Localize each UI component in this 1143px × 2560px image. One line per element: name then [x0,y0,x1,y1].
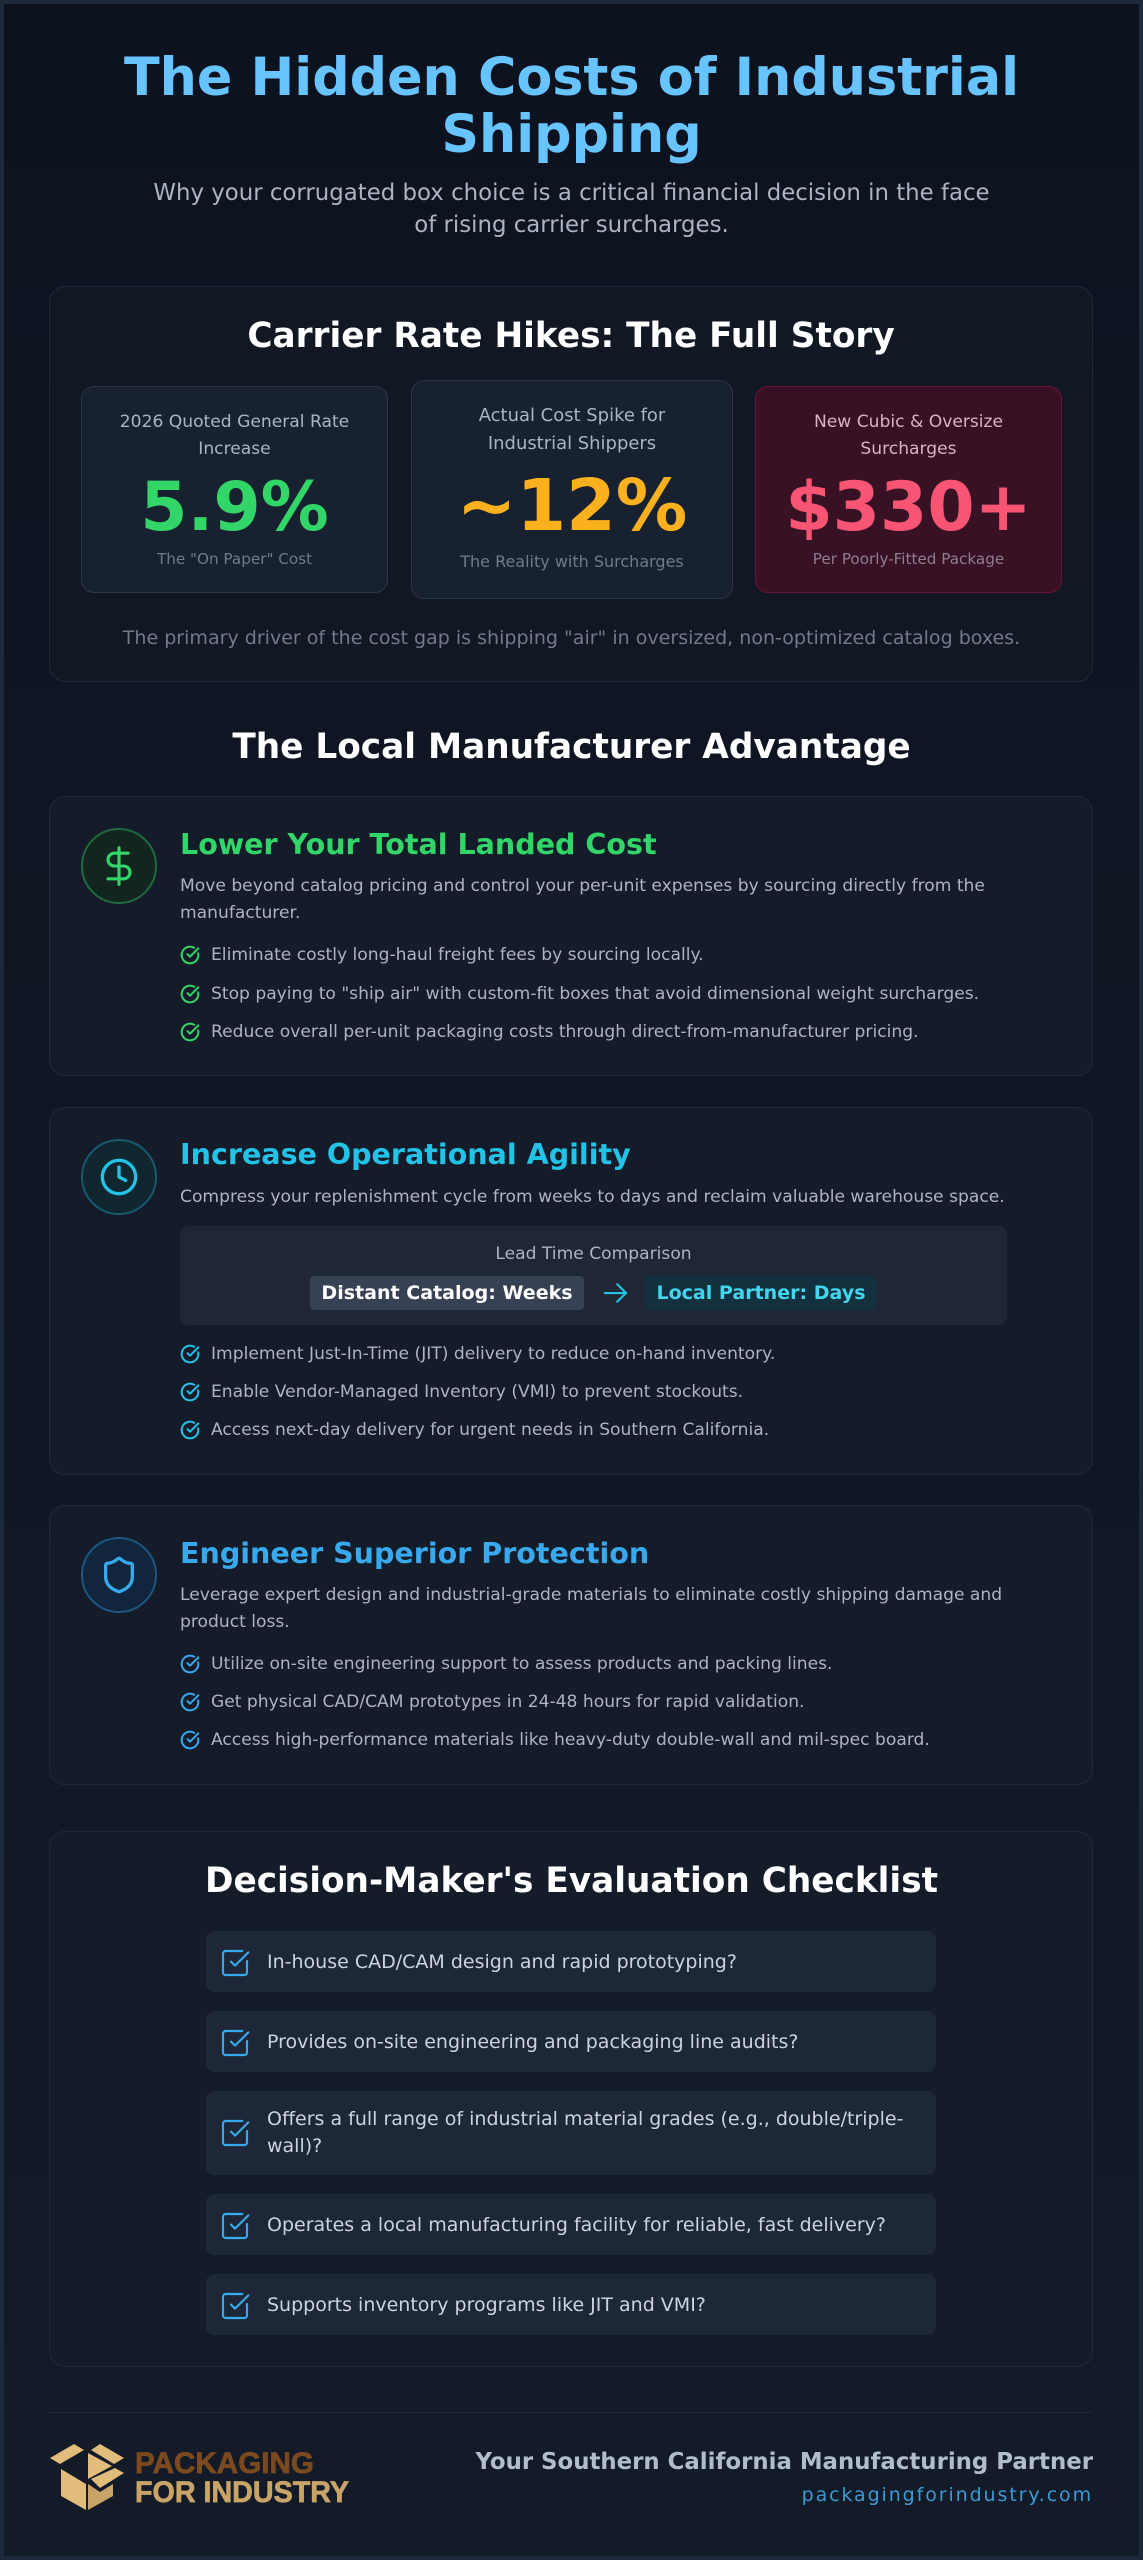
stat label: Industrial Shippers [488,433,656,454]
stat note: The "On Paper" Cost [157,550,312,568]
stat value: 5.9% [140,468,329,547]
bullet: Eliminate costly long-haul freight fees by sourcing locally. [211,945,704,965]
bullet: Stop paying to "ship air" with custom-fit boxes that avoid dimensional weight surcharges. [211,984,979,1004]
bullet: Reduce overall per-unit packaging costs through direct-from-manufacturer pricing. [211,1022,918,1042]
card title: Increase Operational Agility [180,1137,631,1171]
checklist item: In-house CAD/CAM design and rapid prototyping? [267,1951,737,1973]
footer tagline: Your Southern California Manufacturing Partner [475,2449,1093,2475]
chip: local partner [645,1276,877,1310]
card title: Lower Your Total Landed Cost [180,827,657,861]
icon: shield [81,1537,157,1613]
chip: distant catalog: Distant Catalog: Weeks [321,1282,573,1304]
heading: checklist: Decision-Maker's Evaluation Checklist [205,1861,938,1901]
icon: arrow [604,1283,628,1303]
logo wordmark: PACKAGING [135,2447,314,2480]
logo wordmark [135,2447,349,2509]
stat card: actual spike [411,380,733,599]
checklist item: Offers a full range of industrial material grades (e.g., double/triple-wall)? [267,2108,903,2157]
checklist item [206,2011,936,2072]
subtitle [153,180,990,238]
footer url: packagingforindustry.com [802,2484,1093,2506]
card description: Move beyond catalog pricing and control your per-unit expenses by sourcing directly from the manufacturer. [180,876,985,923]
stat label: Actual Cost Spike for [479,405,665,426]
bullet: Access next-day delivery for urgent needs in Southern California. [211,1420,769,1440]
stat card: surcharges [755,386,1062,593]
stat label: Surcharges [860,439,957,459]
panel: carrier rate hikes [49,286,1093,682]
logo wordmark: FOR INDUSTRY [135,2476,349,2509]
panel: agility [49,1107,1093,1475]
heading: advantage: The Local Manufacturer Advantage [232,727,911,767]
bullet: Implement Just-In-Time (JIT) delivery to reduce on-hand inventory. [211,1344,775,1364]
stat card: quoted increase [81,386,388,593]
checklist item [206,2274,936,2335]
checklist item: Provides on-site engineering and packaging line audits? [267,2031,798,2053]
comparison label: Lead Time Comparison [495,1244,692,1264]
stat note: Per Poorly-Fitted Package [813,550,1004,568]
checklist item [206,2091,936,2175]
stat note: The Reality with Surcharges [460,552,684,571]
chip: local partner: Local Partner: Days [656,1282,866,1304]
title: The Hidden Costs of Industrial Shipping [124,47,1019,165]
icon: open box [50,2444,124,2510]
panel: checklist [49,1831,1093,2367]
checklist item: Supports inventory programs like JIT and VMI? [267,2294,706,2316]
checklist item [206,1931,936,1992]
checklist item: Operates a local manufacturing facility for reliable, fast delivery? [267,2214,886,2236]
panel: landed cost [49,796,1093,1076]
checklist item [206,2194,936,2255]
card title: Engineer Superior Protection [180,1536,649,1570]
bullet: Access high-performance materials like heavy-duty double-wall and mil-spec board. [211,1730,930,1750]
bullet: Enable Vendor-Managed Inventory (VMI) to prevent stockouts. [211,1382,743,1402]
chip: distant catalog [310,1276,584,1310]
stat value: $330+ [785,468,1032,547]
cost gap note: The primary driver of the cost gap is shipping "air" in oversized, non-optimized catalog boxes. [123,627,1020,649]
lead time comparison [180,1226,1007,1325]
subtitle: Why your corrugated box choice is a critical financial decision in the face [153,180,990,206]
icon: dollar [81,828,157,904]
stat label [814,412,1003,459]
logo [50,2444,350,2510]
stat label: New Cubic & Oversize [814,412,1003,432]
card description: Leverage expert design and industrial-grade materials to eliminate costly shipping damage and product loss. [180,1585,1002,1632]
footer divider [49,2412,1093,2413]
bullet: Get physical CAD/CAM prototypes in 24-48 hours for rapid validation. [211,1692,804,1712]
stat label [479,405,666,454]
card description: Compress your replenishment cycle from weeks to days and reclaim valuable warehouse space. [180,1187,1005,1207]
icon: clock [81,1139,157,1215]
subtitle: of rising carrier surcharges. [414,212,729,238]
stat label: 2026 Quoted General Rate Increase [120,412,349,459]
heading: carrier rate hikes: Carrier Rate Hikes: The Full Story [247,316,895,356]
panel: protection [49,1505,1093,1785]
bullet: Utilize on-site engineering support to assess products and packing lines. [211,1654,832,1674]
stat value: ~12% [457,464,687,547]
